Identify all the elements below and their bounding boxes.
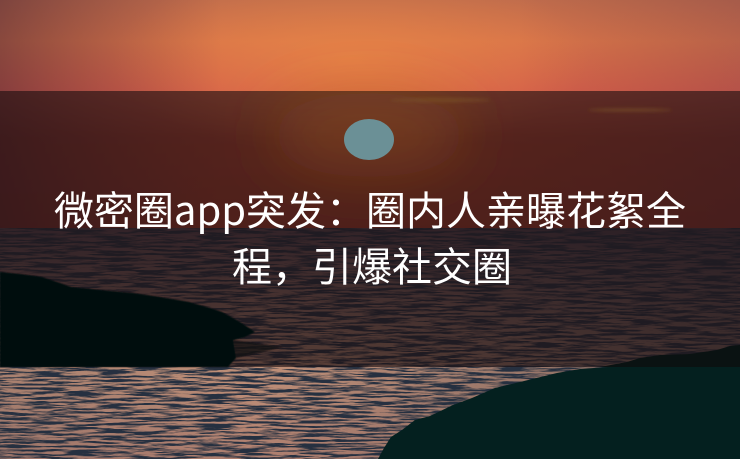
right shore silhouette, upper part bbox=[600, 345, 740, 367]
left island silhouette bbox=[0, 272, 283, 367]
thin clouds bbox=[390, 98, 672, 112]
sun glow bbox=[269, 93, 469, 177]
right shore silhouette, lower part bbox=[378, 367, 740, 459]
sea bbox=[0, 228, 740, 459]
dark overlay band bbox=[0, 91, 740, 367]
title: 微密圈app突发：圈内人亲曝花絮全 程，引爆社交圈 bbox=[54, 179, 686, 293]
sun bbox=[344, 119, 394, 160]
sky bbox=[0, 0, 740, 230]
